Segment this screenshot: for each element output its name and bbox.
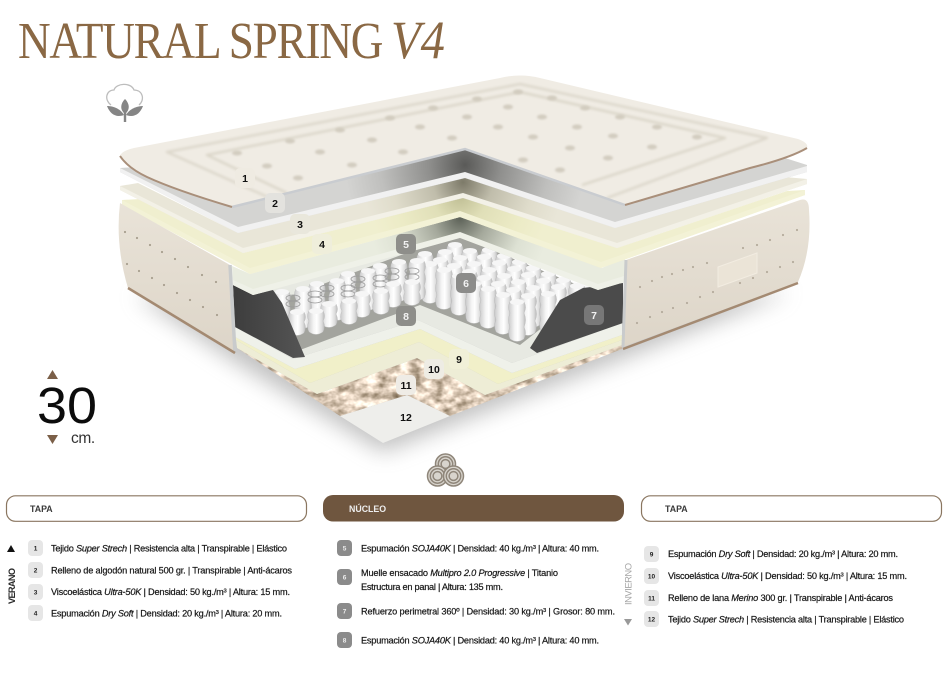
tufting dimples: [232, 90, 702, 180]
left spring block, back row: [274, 258, 426, 332]
item 9: Espumación Dry Soft | Densidad: 20 kg./m³ | Altura: 20 mm.: [668, 549, 898, 559]
list: tapa right: [644, 546, 907, 627]
item 7: [337, 603, 615, 619]
badge 9: 9: [456, 354, 462, 366]
icon: cotton: [107, 84, 143, 122]
item 7: Refuerzo perimetral 360º | Densidad: 30 kg./m³ | Grosor: 80 mm.: [361, 606, 615, 616]
item 2: 2: [34, 568, 38, 574]
springs: pocket coil core: [274, 242, 586, 342]
metal coils: [286, 268, 419, 307]
badge 2: [265, 193, 285, 213]
item 11: [644, 590, 893, 606]
layer 7: perimeter reinforcement, right: [530, 283, 623, 353]
title: NATURAL SPRING: [18, 12, 383, 70]
item 6: 6: [343, 574, 347, 582]
handle: [718, 253, 757, 287]
item 8: 8: [343, 638, 347, 644]
height indicator: 30 cm: cm.: [71, 430, 95, 447]
layer 2: natural cotton: [120, 149, 807, 233]
item 4: [28, 605, 282, 621]
layer 9: dry soft foam: [235, 329, 622, 384]
brown piping: [120, 148, 807, 207]
item 6: Estructura en panal | Altura: 135 mm.: [361, 582, 503, 592]
badge 5: 5: [403, 239, 409, 251]
badge 8: [396, 306, 416, 326]
badge 5: [396, 234, 416, 254]
item 12: Tejido Super Strech | Resistencia alta | Transpirable | Elástico: [668, 614, 904, 624]
left spring block, front row: [288, 279, 420, 336]
badge 3: 3: [297, 219, 303, 231]
badge 1: 1: [242, 173, 248, 185]
stitching: [124, 231, 218, 316]
item 6: [337, 568, 558, 592]
item 7: 7: [343, 608, 347, 616]
item 5: Espumación SOJA40K | Densidad: 40 kg./m³ | Altura: 40 mm.: [361, 544, 599, 554]
badge 1: [235, 168, 255, 188]
badge 3: [290, 214, 310, 234]
badge 11: 11: [400, 380, 412, 392]
layer 11: merino wool: [237, 345, 622, 416]
layer 3: viscoelastic: [120, 177, 807, 253]
item 4: 4: [34, 610, 38, 618]
layer 10: viscoelastic: [236, 340, 622, 395]
list: nucleo: [337, 540, 615, 648]
header: nucleo: [323, 495, 624, 522]
verano indicator: [7, 545, 17, 604]
item 5: [337, 540, 599, 556]
left side panel: [119, 203, 235, 353]
item 8: [337, 632, 599, 648]
item 1: 1: [34, 546, 38, 552]
item 10: Viscoelástica Ultra-50K | Densidad: 50 kg./m³ | Altura: 15 mm.: [668, 571, 907, 581]
badge 7: [584, 305, 604, 325]
item 11: Relleno de lana Merino 300 gr. | Transpirable | Anti-ácaros: [668, 593, 893, 603]
badge 7: 7: [591, 310, 597, 322]
item 2: Relleno de algodón natural 500 gr. | Transpirable | Anti-ácaros: [51, 566, 292, 576]
item 1: Tejido Super Strech | Resistencia alta | Transpirable | Elástico: [51, 544, 287, 554]
title: V4: [391, 10, 445, 70]
item 10: 10: [648, 574, 655, 580]
stitching: [636, 229, 798, 324]
quilted channels: [167, 84, 767, 198]
header: tapa right: [642, 496, 942, 521]
badge 10: [424, 359, 444, 379]
height indicator: 30 cm: [37, 370, 97, 447]
header: tapa left: [6, 496, 306, 521]
item 4: Espumación Dry Soft | Densidad: 20 kg./m³ | Altura: 20 mm.: [51, 608, 282, 618]
item 3: 3: [34, 590, 38, 596]
item 5: 5: [343, 546, 347, 552]
layer 5: soy foam: [232, 217, 625, 295]
item 12: [644, 611, 904, 627]
layer 12: fabric: [340, 395, 450, 443]
item 3: [28, 584, 290, 600]
height indicator: 30 cm: 30: [37, 377, 97, 434]
header: tapa left: TAPA: [30, 504, 53, 514]
verano indicator: VERANO: [7, 568, 17, 604]
header: tapa right: TAPA: [665, 504, 688, 514]
layer 7: perimeter reinforcement, left: [233, 285, 305, 358]
badge 6: [456, 273, 476, 293]
item 11: 11: [648, 596, 655, 602]
item 2: [28, 562, 292, 578]
badge 11: [396, 375, 416, 395]
layer 1: quilted top fabric: [120, 76, 807, 207]
item 1: [28, 540, 287, 556]
right spring block, back to front: [416, 242, 586, 342]
cut edge: [232, 149, 625, 207]
badge 4: [312, 234, 332, 254]
icon: wool: [428, 454, 464, 486]
item 6: Muelle ensacado Multipro 2.0 Progressive | Titanio: [361, 568, 558, 578]
badge 12: 12: [400, 412, 412, 424]
badge 2: 2: [272, 198, 278, 210]
badge 9: [449, 349, 469, 369]
header: nucleo: NÚCLEO: [349, 503, 386, 514]
item 10: [644, 568, 907, 584]
right side panel: [623, 199, 810, 349]
layer number badges on the mattress: [235, 168, 604, 424]
badge 6: 6: [463, 278, 469, 290]
list: tapa left: [28, 540, 292, 621]
invierno indicator: [622, 563, 634, 626]
badge 10: 10: [428, 364, 440, 376]
gaps behind the springs: [280, 235, 590, 350]
layer 8: soy foam: [235, 320, 622, 373]
core floor: [235, 240, 622, 363]
invierno indicator: INVIERNO: [622, 563, 634, 605]
item 9: [644, 546, 898, 562]
item 12: 12: [648, 616, 655, 624]
mattress shadow: [135, 292, 790, 452]
item 9: 9: [650, 552, 654, 558]
badge 8: 8: [403, 311, 409, 323]
layer 4: dry soft foam: [122, 190, 805, 274]
item 3: Viscoelástica Ultra-50K | Densidad: 50 kg./m³ | Altura: 15 mm.: [51, 587, 290, 597]
item 8: Espumación SOJA40K | Densidad: 40 kg./m³ | Altura: 40 mm.: [361, 636, 599, 646]
lower layers 8 to 12: [235, 320, 622, 443]
badge 4: 4: [319, 239, 325, 251]
